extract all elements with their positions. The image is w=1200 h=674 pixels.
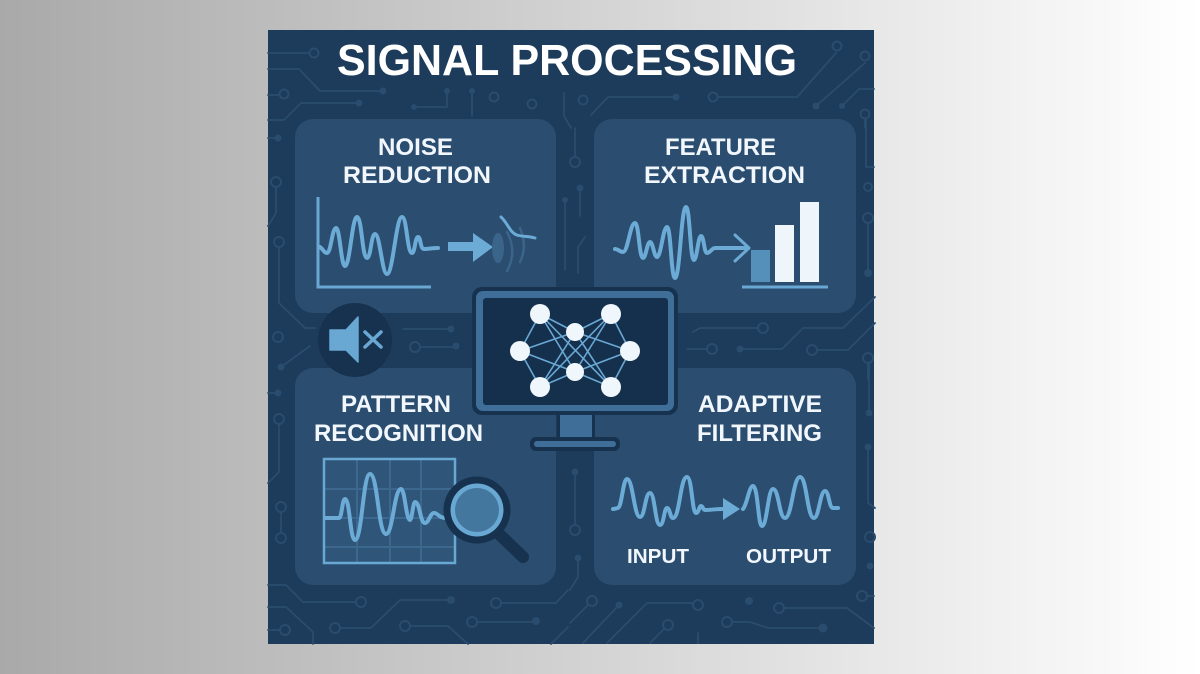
monitor screen [483,298,668,405]
heading: noise reduction: REDUCTION [343,162,491,189]
arrow [448,233,493,262]
chart axes [318,197,431,287]
icon: magnifying glass [444,476,523,557]
reduced signal [492,217,535,271]
panel: pattern recognition [295,368,556,585]
monitor frame [472,287,678,415]
heading: noise reduction [343,134,491,189]
grid chart [324,459,455,563]
heading: adaptive filtering: FILTERING [697,420,822,447]
heading: feature extraction: EXTRACTION [644,162,805,189]
heading: pattern recognition: RECOGNITION [314,420,483,447]
heading: noise reduction: NOISE [378,134,453,161]
bar chart [742,202,828,288]
central monitor [472,287,678,451]
arrow [723,498,740,520]
heading: feature extraction [644,134,805,189]
monitor stand [530,412,620,451]
heading: feature extraction: FEATURE [665,134,776,161]
label: input: INPUT [627,545,689,568]
title: SIGNAL PROCESSING [337,36,797,85]
output waveform [743,477,838,526]
heading: adaptive filtering [697,391,822,447]
icon: muted speaker [318,303,392,377]
noisy waveform [320,217,438,274]
input waveform [613,477,723,525]
panel: adaptive filtering [594,368,856,585]
neural network [510,304,640,397]
panel: feature extraction [594,119,856,313]
waveform with arrow [615,207,749,278]
circuit board pattern [268,42,875,644]
heading: pattern recognition [314,391,483,447]
heading: pattern recognition: PATTERN [341,391,451,418]
panel: noise reduction [295,119,556,313]
label: output: OUTPUT [746,545,831,568]
heading: adaptive filtering: ADAPTIVE [698,391,822,418]
poster background [268,30,874,644]
